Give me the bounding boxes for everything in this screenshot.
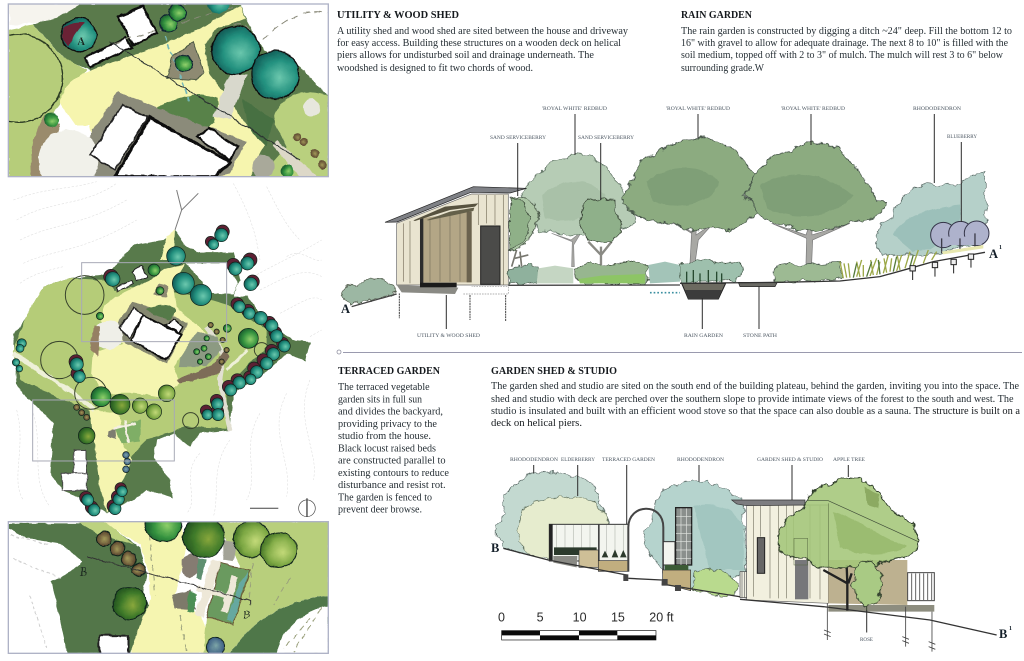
plant labels section A: RAIN GARDEN [684,334,723,339]
text block: garden shed and studio: shed and studio with deck are perched over the southern slope to provide intimate views of the forest to the south and west. The [491,394,1014,405]
helical piers [824,603,935,652]
plant labels section B: GARDEN SHED & STUDIO [757,458,823,463]
shrub: rhododendron middle [643,481,747,590]
text block: rain garden: soil medium, topped off with 2 to 3" of mulch. The mulch will rest 3 to 6" below [681,50,1004,61]
text block: terraced garden: and divides the backyard, [338,406,443,418]
plant labels section A: STONE PATH [743,334,777,339]
scale bar: 10 [573,610,587,624]
section drawing B: garden side [497,472,760,640]
divider [337,350,1022,354]
section marker A prime [989,245,1002,261]
section marker B prime: 1 [1009,626,1012,632]
plant labels section B [510,458,873,643]
text block: terraced garden: providing privacy to the [338,419,438,430]
tree: apple tree [778,477,919,611]
text block: garden shed and studio: The garden shed and studio are sited on the south end of the building plateau, behind the garden, inviting you into the space. The [491,381,1020,392]
plant labels section A: SAND SERVICEBERRY [578,136,634,141]
plant labels section B: RHODODENDRON [677,458,724,463]
heading: garden shed and studio: GARDEN SHED & STUDIO [491,366,617,377]
icon: terraced garden fence and beds [549,524,628,571]
icon: stone path [738,282,777,287]
leader lines section B [534,465,867,632]
text block: utility and wood shed: piers allows for undisturbed soil and drainage underneath. The [337,50,595,61]
shrubs: understory row [508,262,680,284]
text block: utility and wood shed: woodshed is designed to fit two chords of wood. [337,63,533,74]
scale bar: 15 [611,610,625,624]
shrub: elderberry [518,497,608,560]
plant labels section A: RHODODENDRON [913,107,961,112]
tree: sand serviceberry left [510,197,539,267]
text block: rain garden: 16" with gravel to allow for adequate drainage. The next 8 to 10" is filled with the [681,38,1009,49]
scale bar: 0 [498,610,505,624]
text block: garden shed and studio: studio is insulated and built with an efficient wood stove so that the space can also double as a sauna. The structure is built on a [491,406,1021,417]
outline tree circles [41,276,269,429]
plant labels section B: ELDERBERRY [561,458,595,463]
ground line A left [352,285,680,307]
section marker A prime: 1 [999,245,1002,251]
icon: arch fence and bed [663,508,692,591]
shrub: front planting [693,568,738,597]
plant labels section B: TERRACED GARDEN [602,458,655,463]
plan panel: full site plan [12,182,322,517]
section drawing A: shed side [342,154,680,322]
heading: terraced garden: TERRACED GARDEN [338,366,440,377]
heading: rain garden: RAIN GARDEN [681,10,752,21]
text block: rain garden: The rain garden is constructed by digging a ditch ~24" deep. Fill the bottom 12 to [681,26,1012,37]
plan panel: terraced garden detail [8,521,329,654]
plan panel: utility shed and rain garden detail [8,3,329,178]
text block: terraced garden: Black locust raised beds [338,443,436,454]
shrub: left slope planting [342,279,394,303]
leader lines section A [446,114,961,329]
icon: utility and wood shed building [385,187,527,322]
plant labels section A: BLUEBERRY [947,135,977,140]
plant labels section A [417,107,977,339]
icon: garden arch [628,509,663,573]
text block: terraced garden: existing contours to reduce [338,468,450,479]
plant labels section A: SAND SERVICEBERRY [490,136,546,141]
plant labels section B: RHODODENDRON [510,458,558,463]
section drawing A: rain garden side [622,137,989,299]
water pipe marks [650,290,680,295]
shrub: redbud underplanting [773,263,843,282]
section marker B prime [999,626,1012,641]
contour lines [13,182,322,517]
text block: utility and wood shed: for easy access. Building these structures on a wooden deck on helical [337,38,621,49]
plant labels section B: APPLE TREE [833,458,865,463]
tree: rose [853,561,882,610]
text block: terraced garden: studio from the house. [338,431,431,442]
text block: terraced garden: are constructed parallel to [338,456,446,466]
scale bar [498,610,674,640]
text block: rain garden: surrounding grade.W [681,63,765,74]
plant labels section A: 'ROYAL WHITE' REDBUD [781,107,845,112]
tree: royal white redbud right [745,142,886,263]
tree: sand serviceberry right [581,198,621,265]
section marker A prime: A [989,247,998,261]
shrub: rhododendron [877,172,986,255]
shrub: blueberry [931,221,989,254]
section drawing B: studio side [732,477,997,652]
text block: terraced garden: The garden is fenced to [338,492,432,503]
section marker B: B [491,541,499,555]
scale bar: 20 ft [649,610,674,624]
section marker A: A [341,302,350,316]
plant labels section B: ROSE [860,638,873,643]
text block: garden shed and studio [491,381,1021,429]
planted trees [12,225,290,516]
plan panel: utility shed and rain garden detail: A [77,34,86,48]
text block: terraced garden: garden sits in full sun [338,394,422,405]
plant labels section A: 'ROYAL WHITE' REDBUD [542,107,607,112]
heading: utility and wood shed: UTILITY & WOOD SHED [337,10,459,21]
shrub: rain garden planting [680,260,742,282]
text block: terraced garden [338,382,450,516]
footings [623,574,681,591]
plant labels section A: 'ROYAL WHITE' REDBUD [666,107,730,112]
text block: terraced garden: prevent deer browse. [338,504,422,516]
ground line B left [503,548,760,600]
text block: terraced garden: disturbance and resist rot. [338,480,446,491]
scale and north arrow [250,498,315,517]
icon: garden shed and studio [732,500,907,605]
grasses [840,250,937,278]
plan panel: terraced garden detail: B [80,566,88,578]
text block: terraced garden: The terraced vegetable [338,382,430,393]
plant labels section A: UTILITY & WOOD SHED [417,334,480,339]
text block: garden shed and studio: deck on helical piers. [491,418,582,429]
tree: royal white redbud back [522,154,637,267]
plan panel: terraced garden detail: B [243,609,251,621]
text block: utility and wood shed: A utility shed and wood shed are sited between the house and driveway [337,26,628,37]
inset outline rectangles [33,263,227,461]
text block: utility and wood shed [337,26,628,74]
shrub: rhododendron back [497,472,608,560]
terrace footings [910,254,974,280]
icon: deck railing [828,573,934,612]
section marker B prime: B [999,627,1007,641]
ground line A right [680,252,985,283]
text block: rain garden [681,26,1012,74]
icon: rain garden basin [682,270,726,299]
ground line B right [740,599,997,635]
tree: royal white redbud left [622,137,758,263]
scale bar: 5 [537,610,544,624]
